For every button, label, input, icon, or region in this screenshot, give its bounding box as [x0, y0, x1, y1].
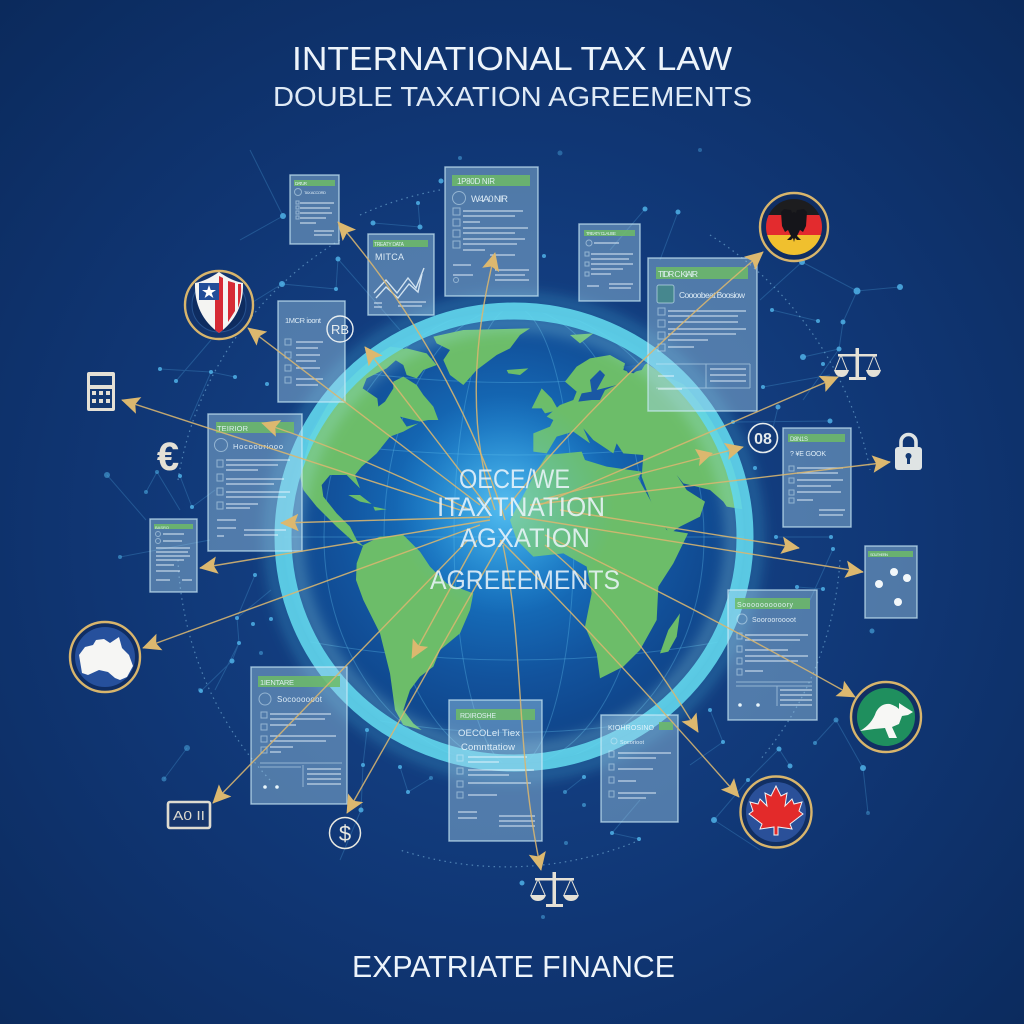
document panel 10: stars — [865, 546, 917, 618]
document panel 8 — [208, 414, 302, 551]
centre line 4: AGREEEMENTS — [430, 565, 620, 595]
arrow to upper scales — [540, 377, 838, 505]
document panel 14 — [601, 715, 678, 822]
icon: certificate box: A0 II — [173, 808, 205, 823]
document panel 13 — [449, 700, 542, 841]
icon: dollar: $ — [339, 821, 351, 846]
document panel 4: TREATY CLAUSE — [586, 231, 616, 236]
icon: dollar — [330, 818, 360, 848]
badge: RB — [327, 316, 353, 342]
document panel 13: RDIROSHE — [460, 713, 496, 720]
arrow to kangaroo badge — [545, 535, 855, 697]
arrow to lower right — [545, 545, 698, 732]
document panel 11 — [728, 590, 817, 720]
icon: Australia badge — [70, 622, 140, 692]
document panel 3: 1P80D NIR — [457, 177, 495, 186]
icon: US shield badge — [185, 271, 253, 339]
arrow to German flag — [505, 252, 763, 510]
document panel 6 — [278, 301, 345, 402]
arrow to dollar icon — [347, 540, 502, 813]
centre line 3: AGXATION — [460, 523, 590, 553]
document panel 7: ? ¥E GOOK — [790, 451, 826, 458]
document panel 5: Coooobeat Boosiow — [679, 290, 746, 300]
arrow to lower scales — [503, 545, 541, 870]
icon: German flag badge — [760, 193, 828, 261]
arrow to panel 8 header — [262, 423, 470, 510]
document panel 2: MITCA: MITCA — [375, 252, 404, 262]
network constellation — [104, 148, 903, 919]
icon: scales bottom — [530, 872, 579, 907]
icon: scales upper right — [834, 348, 881, 380]
arrow to panel 8 lower — [281, 517, 490, 523]
arrow to certificate icon — [213, 540, 468, 803]
document panel 13: OECOLel Tiex — [458, 728, 520, 739]
centre line 2: ITAXTNATION — [437, 492, 605, 522]
title — [273, 40, 752, 112]
document panel 10: stars: SOUTHERN — [870, 552, 888, 557]
document panel 7 — [783, 428, 851, 527]
icon: 08 badge — [748, 424, 778, 452]
icon: 08 badge: 08 — [754, 431, 772, 448]
document panel 2: MITCA: TREATY DATA — [374, 242, 405, 248]
arrow to lock — [530, 462, 890, 505]
black eagle — [781, 209, 807, 242]
document panel 5 — [648, 258, 757, 411]
document panel 1: TAX ACCORD — [304, 190, 326, 195]
centre line 1: OECE/WE — [459, 464, 570, 494]
document panel 11: Soooooooooory — [737, 602, 794, 609]
arrow to shield — [248, 328, 480, 505]
arrows radiating from the globe centre — [122, 222, 890, 870]
inner rim glow — [295, 323, 733, 751]
heading: main title: INTERNATIONAL TAX LAW — [292, 40, 733, 77]
icon: kangaroo badge — [851, 682, 921, 752]
heading: subtitle: DOUBLE TAXATION AGREEMENTS — [273, 81, 752, 112]
document panel 5: TIDR C KIAIR — [658, 269, 698, 279]
document panel 9 — [150, 519, 197, 592]
icon: euro: € — [157, 435, 179, 479]
arrow to Australia badge — [143, 525, 480, 648]
arrow to panel 9 — [200, 520, 490, 568]
Eurasia, Africa and British Isles — [510, 333, 747, 678]
icon: padlock — [895, 435, 922, 470]
globe centre text — [430, 464, 620, 595]
document panel 14: KIOHROSINO — [608, 725, 655, 732]
document panel 8: TEIRIOR — [217, 424, 249, 433]
document panel 12 — [251, 667, 347, 804]
document panel 4 — [579, 224, 640, 301]
document panel 3: W4A0 NIR — [471, 194, 508, 205]
central glow — [395, 395, 615, 615]
line chart — [374, 268, 424, 298]
icon: Canadian maple leaf badge — [740, 776, 812, 848]
continents — [300, 328, 747, 730]
footer label: EXPATRIATE FINANCE — [352, 949, 675, 984]
arrow to calculator — [122, 400, 460, 510]
southern cross stars — [875, 568, 911, 606]
badge: RB: RB — [331, 322, 349, 337]
document panel 11: Soorooroooot — [752, 617, 796, 624]
document panel 7: D8N1S — [790, 437, 808, 443]
document panel 2: MITCA — [368, 234, 434, 315]
globe grid lines — [292, 320, 736, 754]
document panel 12: 1IENTARE — [260, 678, 294, 687]
document panel 9: BASRO — [155, 525, 169, 530]
arrow to 08 badge — [540, 447, 743, 500]
document panel 3 — [445, 167, 538, 296]
arrow to right of globe — [560, 510, 799, 548]
icon: certificate box — [168, 802, 210, 828]
arrow to Canada badge — [500, 540, 739, 797]
mid arrowhead on 08 line — [695, 449, 713, 466]
document panel 13: Comnttatiow — [461, 742, 515, 753]
document panel 6: 1MCR ioont — [285, 316, 322, 325]
document panel 14: Socorioot — [620, 740, 644, 746]
document panel 1: DATUR — [295, 181, 308, 186]
document panel 1 — [290, 175, 339, 244]
arrow to stars panel — [520, 517, 863, 572]
arrow to South America — [412, 540, 477, 658]
South America and Madagascar — [356, 535, 680, 730]
globe rim — [283, 311, 745, 763]
arrow to panel 3 — [476, 253, 495, 510]
arrow to panel 1 — [338, 222, 505, 520]
globe — [271, 299, 757, 775]
Americas north and Greenland — [300, 328, 530, 547]
icon: calculator — [87, 372, 115, 411]
document panel 12: Socoooooot — [277, 695, 323, 704]
document panel 8: Hocoooriooo — [233, 442, 283, 451]
arrow to north globe — [365, 347, 490, 510]
